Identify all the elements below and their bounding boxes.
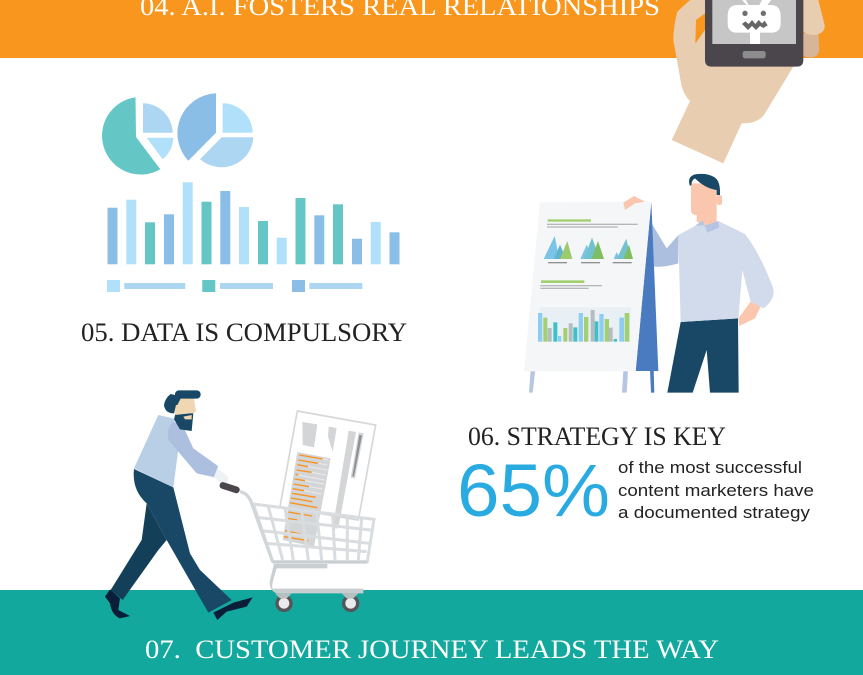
stat: 65%: 65% [457, 449, 610, 532]
chart: bar chart [108, 182, 400, 264]
chart: pie charts [102, 93, 253, 175]
stat description [618, 458, 814, 522]
teal banner [0, 590, 863, 675]
chart legend [107, 280, 362, 292]
orange banner [0, 0, 863, 58]
illustration: man pushing shopping cart [105, 390, 376, 620]
stat description: a documented strategy [618, 503, 811, 522]
heading 05: 05. DATA IS COMPULSORY [81, 318, 407, 347]
heading 07: 07. CUSTOMER JOURNEY LEADS THE WAY [145, 635, 719, 664]
stat description: content marketers have [618, 481, 814, 500]
illustration: presenter with flip chart [524, 174, 774, 393]
stat description: of the most successful [618, 458, 802, 477]
heading 06: 06. STRATEGY IS KEY [468, 422, 726, 451]
icon: hand holding phone with robot [672, 0, 825, 163]
